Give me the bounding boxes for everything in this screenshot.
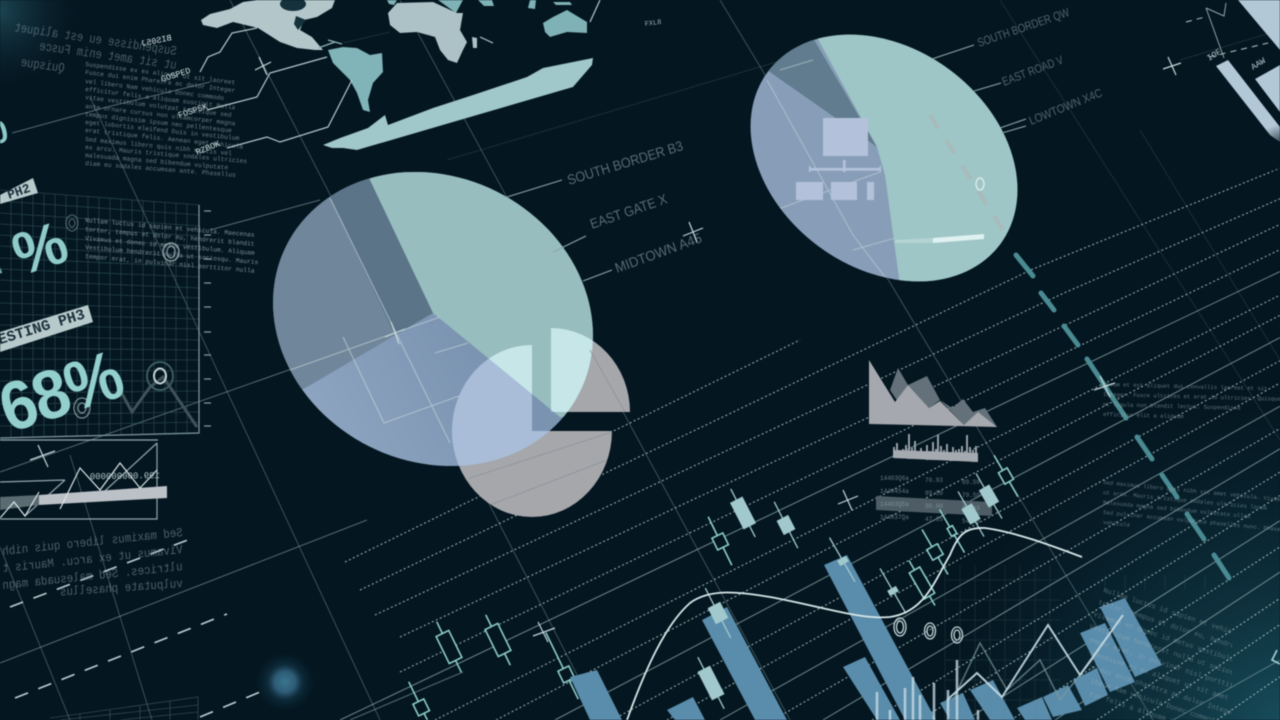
slice: slate: [273, 179, 395, 390]
icon: org chart: [796, 118, 881, 200]
small text block, top left: erat tristique felis. Aenean eget vehicula: [85, 127, 244, 151]
data table: 14403Q6a: [880, 475, 909, 482]
panel note text: Vestibulum hendrerit nulla ut sociosqu. Mauris: [85, 244, 259, 266]
progress bar in pie: [895, 234, 984, 243]
solid trend grid: [340, 262, 1280, 720]
bar chart, top right: IOF: [1205, 47, 1224, 64]
white trend curve: [627, 528, 1082, 720]
data table: 68.40: [962, 505, 980, 512]
small text block, top left: vel libero Nam vehicula Donec commodo: [85, 78, 225, 102]
map connector lines: [200, 0, 600, 148]
upper pie labels: EAST ROAD V: [1000, 53, 1066, 89]
dashed teal axis: [1016, 255, 1229, 578]
north america: [201, 0, 342, 50]
connector labels: FXL8: [644, 19, 662, 29]
dashed guide lines, lower left: [10, 538, 260, 717]
grid panel, left: [0, 190, 259, 438]
blue bar chart: [570, 555, 1162, 720]
antarctica: [323, 58, 593, 150]
south america: [328, 47, 383, 112]
bar chart, top right: [1186, 0, 1280, 176]
lens flare: [255, 652, 315, 712]
data table: 14403Q5a: [880, 501, 909, 508]
australia: [543, 10, 587, 37]
slice: lavender: [272, 172, 594, 467]
stat label: PH2: [0, 178, 38, 204]
main pie labels: MIDTOWN A45: [613, 230, 704, 276]
text block, mid right upper: Ipsum et est aliquet dui convallis laoreet et sit: [1103, 381, 1268, 392]
upper pie labels: SOUTH BORDER QW: [976, 6, 1072, 50]
upper pie labels: LOWTOWN X4C: [1027, 87, 1104, 128]
main pie labels: [507, 138, 704, 281]
data table: 79.50: [962, 492, 980, 499]
small text block, top left: malesuada magna sed bibendum vulputate: [85, 152, 229, 172]
panel rings: [66, 215, 179, 418]
data table: 54.10: [962, 518, 980, 525]
small text block, top left: diam eu sodales accumsan ante. Phasellus: [85, 160, 236, 179]
connector labels: RZBOK: [194, 139, 223, 158]
rings on curve: [894, 618, 962, 643]
panel note text: [85, 217, 259, 275]
world map: [201, 0, 593, 150]
slice: teal: [370, 172, 594, 418]
mirrored text block, top left: [13, 20, 178, 76]
small text block, top left: Fusce dui enim Pharetra ac dolor Integer: [85, 69, 236, 94]
small text block, top left: tempus dignissim ipsum nec pellentesque: [85, 111, 232, 134]
data table: 1440454a: [880, 488, 909, 495]
grey line chart: [120, 377, 197, 427]
connector labels: [141, 19, 662, 158]
pie chart: upper right: [750, 34, 1018, 282]
madagascar: [472, 37, 477, 48]
slice: slate: [768, 40, 876, 146]
small text block, top left: Suspendisse ex ex aliquet ut sit laoreet: [85, 61, 236, 86]
text block, mid right lower: vehicula: [1103, 519, 1131, 529]
ring in pie: [976, 178, 984, 190]
pie inner lines: [290, 198, 468, 444]
connector labels: FOSP5K: [177, 102, 210, 121]
small text block, top left: Sed maximus libero quis nibh mattis vel: [85, 136, 232, 157]
upper pie labels: [932, 6, 1104, 133]
panel note text: Vivamus et donec id metus vestibulum. Aliquam: [85, 235, 255, 257]
mirrored text block, bottom left: Vivamus ut ex arcu. Mauris t: [2, 543, 183, 576]
faint chart, bottom left: [50, 697, 198, 720]
small trend chart: 199.000000000: [90, 471, 160, 482]
small text block, top left: ante ornare cursus non ullamcorper magna: [85, 103, 236, 127]
pie inner lines: [767, 60, 895, 290]
stat label: PH2: PH2: [5, 181, 33, 203]
text block, lower right: [1090, 588, 1232, 720]
panel note text: tempor erat, in pulvinar nisl porttitor nulla: [85, 253, 255, 275]
panel note text: Nullam luctus id sapien et vehicula. Maecenas: [85, 217, 255, 239]
data table: 90.00: [925, 503, 943, 510]
stat: percent upper: %: [4, 208, 76, 288]
area chart: [869, 360, 997, 427]
panel note text: tortor, tempus et dolor eu, hendrerit blandit: [85, 226, 255, 248]
pie chart: small exploded: [452, 328, 631, 518]
mirrored text block, bottom left: vulputate phasellus: [60, 577, 183, 600]
small text block, top left: vitae vestibulum volutpat tristique sed: [85, 94, 232, 119]
line chart over bars: [947, 615, 1123, 700]
small text block, top left: ex arcu. Mauris tristique sodales ultricies: [85, 144, 248, 165]
mirrored text block, top left: ut sit amet enim Fusce: [38, 39, 178, 73]
candlesticks: hollow: [403, 453, 1022, 720]
data table: [876, 475, 992, 525]
small text block, top left: efficitur felis a aliquam suscipit Nulla: [85, 86, 236, 111]
pie chart: main: [272, 171, 594, 467]
mirrored text block, top left: Suspendisse eu est aliquet: [13, 20, 178, 59]
cross markers: [30, 57, 1181, 642]
small text block, top left: [85, 61, 248, 179]
candlesticks: filled: [692, 470, 1007, 712]
bar chart, top right: AAW: [1249, 55, 1268, 73]
dotted trend grid: [345, 160, 1280, 720]
main pie labels: SOUTH BORDER B3: [565, 138, 685, 188]
dashes seen through pie: [929, 114, 1004, 230]
data table: 144037Qa: [880, 514, 909, 521]
text block, mid right upper: efficitur elit a aliquam: [1103, 411, 1184, 420]
histogram: [893, 434, 978, 462]
mirrored text block, bottom left: ultrices. Sed malesuada magn: [2, 560, 183, 593]
white vertical bars: [877, 660, 978, 720]
text block, mid right lower: Malesuada magna sed bibendum vulputate ullam: [1103, 499, 1251, 520]
small text block, top left: eget lobortis eleifend Duis in vestibulum: [85, 119, 240, 142]
mirrored text block, bottom left: Sed maximus libero quis nibh: [2, 526, 183, 559]
data table: 89.50: [925, 490, 943, 497]
text block, mid right lower: [1103, 479, 1280, 534]
mirrored text block, bottom left: [2, 526, 183, 600]
text block, mid right lower: ut arcu. Mauris tristique sodales ultricies lorem: [1103, 489, 1268, 512]
slice: lavender: [750, 34, 1018, 282]
text block, mid right upper: Integer. Fusce ultrices et erat id ultricies. Quisque: [1103, 391, 1280, 403]
mirrored text block, top left: Quisque: [20, 55, 66, 76]
grid lines: faint far axes: [343, 0, 1280, 440]
corner marker, lower right: [1272, 650, 1280, 664]
connector labels: GOSPED: [160, 66, 192, 85]
main pie labels: EAST GATE X: [588, 191, 669, 232]
europe and asia fragments: [387, 0, 572, 13]
data table: 89.50: [962, 479, 980, 486]
africa: [388, 2, 467, 63]
text block, mid right upper: et ligula non blandit lectus. Suspendisse: [1103, 401, 1241, 412]
small trend chart: [0, 440, 167, 519]
data table: 47.35: [925, 516, 943, 523]
text block, mid right upper: [1103, 381, 1280, 420]
faint background grid, lower right: [945, 565, 1205, 720]
data table: 70.93: [925, 477, 943, 484]
connector labels: BIS05J: [141, 33, 173, 49]
slice: teal: [818, 34, 1018, 282]
